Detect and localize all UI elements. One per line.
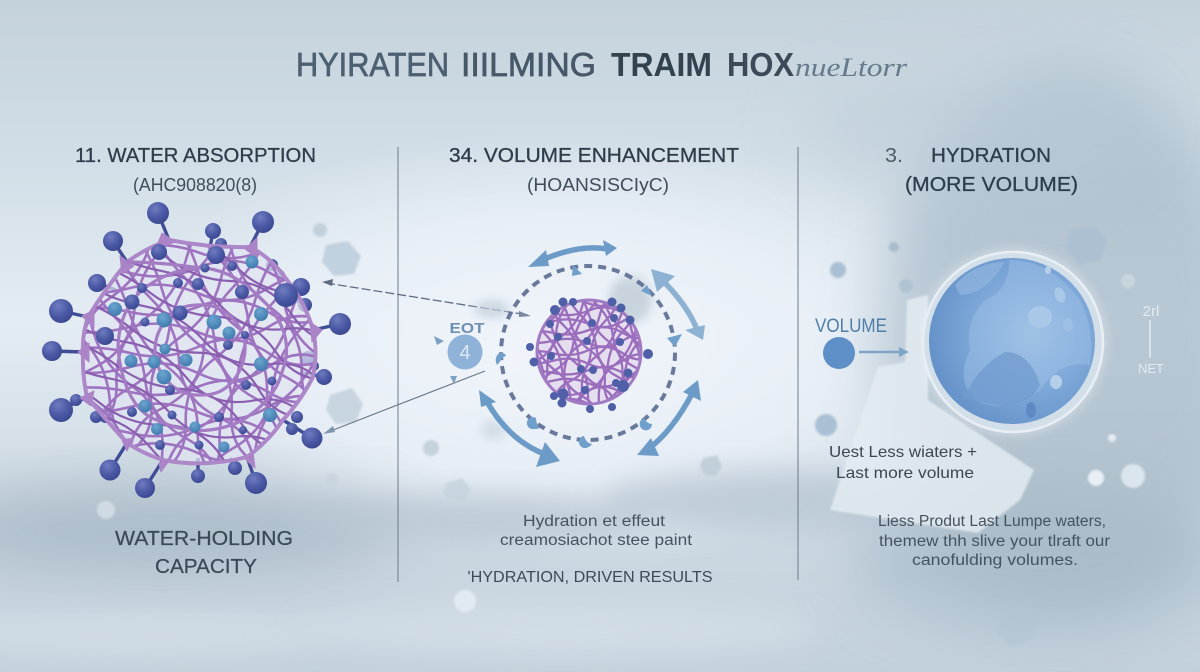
arrow: right [651, 269, 705, 340]
heading: hydration: HYDRATION [931, 145, 1051, 167]
caption: water-holding capacity: CAPACITY [155, 556, 257, 578]
caption: hydration effect: creamosiachot stee paint [500, 532, 693, 549]
heading: water absorption: (AHC908820(8) [133, 175, 257, 195]
heading: hydration: 3. [885, 145, 903, 167]
callout: less water more volume: Last more volume [836, 465, 974, 482]
panel: water absorption [42, 148, 351, 574]
product tube [830, 295, 1034, 533]
badge: 4: EOT [450, 320, 484, 337]
panel: hydration more volume [815, 145, 1164, 569]
title: IIILMING [461, 46, 596, 83]
heading: water absorption: 11. WATER ABSORPTION [75, 145, 316, 167]
description text: Liess Produt Last Lumpe waters, [878, 513, 1106, 530]
caption: hydration effect: 'HYDRATION, DRIVEN RESULTS [468, 569, 712, 586]
caption: hydration effect: Hydration et effeut [523, 513, 666, 530]
small molecule [526, 298, 653, 413]
badge: 4 [434, 320, 484, 384]
scale marker: NET [1138, 361, 1164, 376]
blurred shadow behind molecule [474, 276, 652, 440]
caption: water-holding capacity: WATER-HOLDING [115, 528, 293, 550]
dividers [398, 147, 798, 582]
arrow: dashed connector upper [322, 279, 531, 317]
heading: volume enhancement: (HOANSISCIyC) [527, 175, 669, 195]
caption: hydration effect [468, 513, 712, 586]
molecule stems and outer spheres [42, 202, 351, 498]
title: TRAIM [611, 46, 712, 83]
scale marker: 2rl [1143, 303, 1159, 320]
heading: water absorption [75, 145, 316, 195]
title: HOX [727, 46, 794, 83]
caption: water-holding capacity [115, 528, 293, 578]
panel: volume enhancement [434, 145, 739, 586]
heading: volume enhancement [449, 145, 739, 195]
callout: less water more volume [829, 444, 977, 482]
inner water spheres [96, 244, 298, 452]
floating hexagon particles [97, 223, 1145, 648]
circular arrows [479, 240, 705, 467]
description text: themew thh slive your tlraft our [879, 533, 1110, 550]
heading: volume enhancement: 34. VOLUME ENHANCEMENT [449, 145, 739, 167]
dashed ring [501, 266, 675, 440]
scale marker [1138, 303, 1164, 376]
heading: hydration [885, 145, 1078, 196]
swelling diagram [434, 240, 705, 467]
badge: 4: 4 [459, 342, 471, 364]
arrow: lower left [479, 390, 560, 467]
molecule network [42, 202, 351, 498]
description text: canofulding volumes. [912, 552, 1078, 569]
title [296, 46, 908, 83]
volume label and arrow [815, 316, 909, 369]
description text [878, 513, 1110, 569]
arrow: lower right [637, 380, 701, 456]
arrow: connector lower [323, 371, 485, 434]
sphere [919, 248, 1107, 436]
ring chevrons [496, 265, 682, 448]
purple web [78, 232, 322, 472]
title: HYIRATEN [296, 46, 449, 83]
title: nueLtorr [795, 53, 908, 82]
heading: hydration: (MORE VOLUME) [905, 174, 1078, 196]
volume label and arrow: VOLUME [815, 316, 887, 337]
arrow: top [528, 240, 617, 267]
callout: less water more volume: Uest Less wiaters + [829, 444, 977, 461]
